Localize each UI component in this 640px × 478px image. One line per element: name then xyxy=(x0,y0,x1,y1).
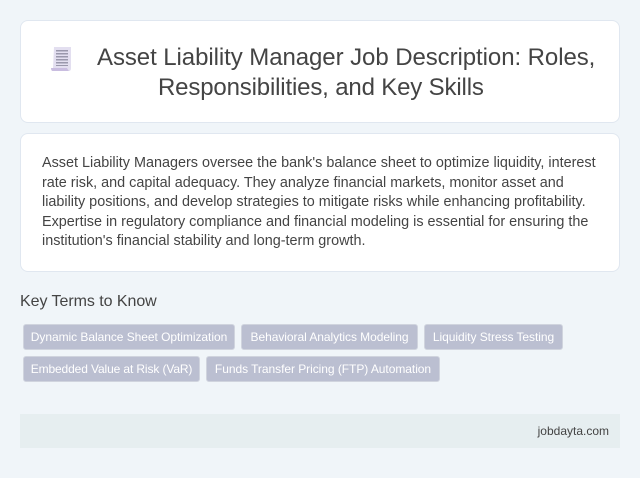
tag xyxy=(206,356,440,382)
description text: liability positions, and develop strategies to mitigate risks while enhancing profitability. xyxy=(42,194,586,210)
icon: document receipt xyxy=(51,47,71,71)
tag xyxy=(23,324,235,350)
title: Asset Liability Manager Job Description: Roles, xyxy=(97,44,595,71)
description text: Expertise in regulatory compliance and financial modeling is essential for ensuring the xyxy=(42,214,588,230)
tag: Liquidity Stress Testing xyxy=(433,330,554,344)
header panel xyxy=(20,20,620,123)
panel: description xyxy=(20,133,620,272)
description text xyxy=(42,155,596,249)
title: Responsibilities, and Key Skills xyxy=(158,74,484,101)
tag xyxy=(424,324,563,350)
title xyxy=(97,44,595,101)
footer text: jobdayta.com xyxy=(538,424,609,438)
tag group: key terms xyxy=(23,324,563,382)
tag: Dynamic Balance Sheet Optimization xyxy=(31,330,227,344)
description text: Asset Liability Managers oversee the bank's balance sheet to optimize liquidity, interest xyxy=(42,155,596,171)
description text: institution's financial stability and long-term growth. xyxy=(42,233,366,249)
tag: Funds Transfer Pricing (FTP) Automation xyxy=(215,362,431,376)
tag: Embedded Value at Risk (VaR) xyxy=(31,362,192,376)
tag: Behavioral Analytics Modeling xyxy=(250,330,408,344)
footer bar xyxy=(20,414,620,448)
heading: key terms: Key Terms to Know xyxy=(20,293,157,310)
tag xyxy=(241,324,418,350)
description text: rate risk, and capital adequacy. They analyze financial markets, monitor asset and xyxy=(42,174,564,190)
tag xyxy=(23,356,200,382)
